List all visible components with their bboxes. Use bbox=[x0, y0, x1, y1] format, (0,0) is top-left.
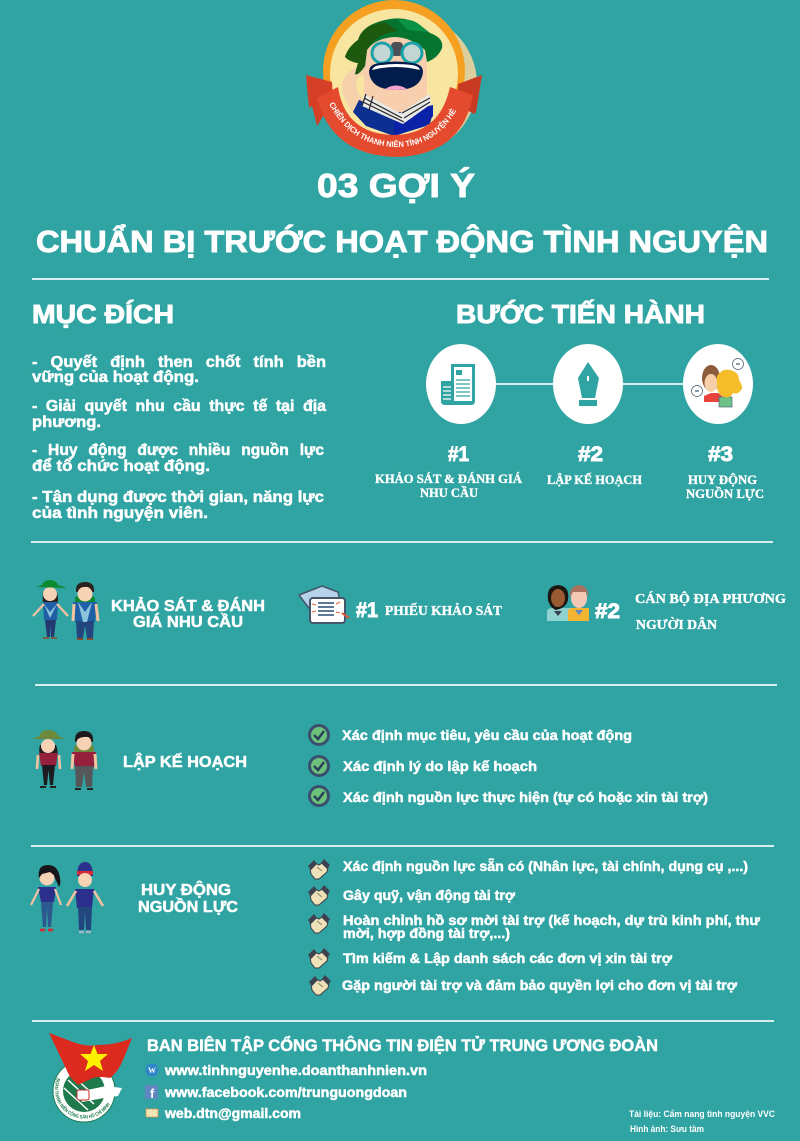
list item 1 bbox=[308, 857, 748, 879]
panel: planning section bbox=[32, 726, 708, 806]
step 3 label: #3 bbox=[708, 443, 733, 466]
facebook row: www.facebook.com/trunguongdoan bbox=[164, 1084, 407, 1100]
step 3 label: HUY ĐỘNG bbox=[688, 473, 757, 487]
purpose text block bbox=[32, 354, 326, 522]
website row: www.tinhnguyenhe.doanthanhnien.vn bbox=[164, 1062, 427, 1078]
panel: fundraising section bbox=[31, 857, 761, 995]
purpose text block: của tình nguyện viên. bbox=[32, 505, 208, 522]
fundraising list bbox=[308, 857, 761, 995]
website row: W bbox=[148, 1066, 156, 1075]
check item 1: Xác định mục tiêu, yêu cầu của hoạt động bbox=[342, 727, 632, 743]
icon: step 3 two people talking bbox=[683, 344, 753, 424]
purpose text block: - Quyết định then chốt tính bền bbox=[32, 354, 326, 371]
source credits bbox=[629, 1109, 775, 1134]
icon: campaign mascot badge bbox=[306, 0, 482, 157]
heading: steps: BƯỚC TIẾN HÀNH bbox=[456, 299, 705, 329]
step 1 label: NHU CẦU bbox=[420, 485, 478, 500]
list item 1: Xác định nguồn lực sẵn có (Nhân lực, tài chính, dụng cụ ,...) bbox=[343, 857, 748, 874]
survey section heading: GIÁ NHU CẦU bbox=[133, 612, 243, 631]
source credits: Tài liệu: Cẩm nang tình nguyện VVC bbox=[629, 1109, 775, 1119]
list item 5: Gặp người tài trợ và đảm bảo quyền lợi cho đơn vị tài trợ bbox=[342, 977, 737, 993]
item 1 label: #1 bbox=[356, 599, 378, 622]
purpose text block: vững của hoạt động. bbox=[32, 369, 199, 386]
list item 2 bbox=[308, 885, 515, 905]
list item 3: mời, hợp đồng tài trợ,...) bbox=[343, 925, 510, 941]
title line 1: 03 GỢI Ý bbox=[317, 167, 475, 204]
panel: steps bbox=[375, 299, 764, 501]
checklist bbox=[310, 726, 708, 806]
survey section heading bbox=[111, 596, 265, 631]
item 2 label bbox=[595, 590, 786, 633]
step 1 label bbox=[375, 443, 522, 500]
step 3 label bbox=[686, 443, 764, 501]
icon: youth union emblem bbox=[49, 1033, 132, 1122]
list item 4: Tìm kiếm & Lập danh sách các đơn vị xin tài trợ bbox=[343, 950, 672, 966]
email row: web.dtn@gmail.com bbox=[164, 1105, 301, 1121]
purpose text block: phương. bbox=[32, 414, 101, 431]
item 2 label: NGƯỜI DÂN bbox=[636, 616, 717, 633]
fundraising section heading: HUY ĐỘNG bbox=[141, 880, 231, 899]
fundraising section heading bbox=[138, 880, 238, 916]
icon: volunteers in navy polo bbox=[31, 862, 103, 932]
heading: purpose: MỤC ĐÍCH bbox=[32, 299, 174, 329]
step 1 label: #1 bbox=[448, 443, 469, 466]
step 2 label: #2 bbox=[578, 443, 603, 466]
step 1 label: KHẢO SÁT & ĐÁNH GIÁ bbox=[375, 472, 522, 486]
icon: step 1 newspaper bbox=[426, 344, 496, 424]
facebook row: f bbox=[150, 1086, 155, 1101]
icon: volunteers in red polo bbox=[32, 730, 96, 789]
step 2 label: LẬP KẾ HOẠCH bbox=[547, 472, 642, 487]
item 2 label: CÁN BỘ ĐỊA PHƯƠNG bbox=[635, 590, 786, 607]
list item 2: Gây quỹ, vận động tài trợ bbox=[343, 887, 515, 903]
purpose text block: - Giải quyết nhu cầu thực tế tại địa bbox=[32, 398, 326, 415]
step 3 label: NGUỒN LỰC bbox=[686, 486, 764, 501]
icon: survey form bbox=[299, 586, 349, 623]
survey section heading: KHẢO SÁT & ĐÁNH bbox=[111, 596, 265, 615]
list item 3: Hoàn chỉnh hồ sơ mời tài trợ (kế hoạch, dự trù kinh phí, thư bbox=[343, 912, 761, 928]
list item 3 bbox=[308, 912, 761, 941]
item 1 label bbox=[356, 599, 502, 622]
fundraising section heading: NGUỒN LỰC bbox=[138, 897, 238, 916]
step 2 label bbox=[547, 443, 642, 487]
item 1 label: PHIẾU KHẢO SÁT bbox=[385, 603, 502, 618]
purpose text block: - Tận dụng được thời gian, năng lực bbox=[32, 489, 324, 506]
item 2 label: #2 bbox=[595, 600, 620, 623]
footer heading: BAN BIÊN TẬP CỔNG THÔNG TIN ĐIỆN TỬ TRUNG ƯƠNG ĐOÀN bbox=[147, 1036, 658, 1055]
icon: youth union emblem: ĐOÀN THANH NIÊN CỘNG SẢN HỒ CHÍ MINH bbox=[54, 1078, 110, 1119]
planning section heading: LẬP KẾ HOẠCH bbox=[123, 752, 247, 771]
title line 2: CHUẨN BỊ TRƯỚC HOẠT ĐỘNG TÌNH NGUYỆN bbox=[36, 223, 768, 259]
panel: survey section bbox=[33, 580, 786, 639]
icon: campaign mascot badge: CHIẾN DỊCH THANH NIÊN TÌNH NGUYỆN HÈ bbox=[330, 102, 456, 147]
panel: footer bbox=[49, 1033, 775, 1134]
icon: local officials and residents bbox=[547, 585, 589, 621]
icon: volunteers in blue uniform bbox=[33, 580, 98, 639]
panel: purpose bbox=[32, 299, 326, 522]
icon: step 2 pen nib bbox=[553, 344, 623, 424]
check item 2: Xác định lý do lập kế hoạch bbox=[343, 758, 537, 774]
purpose text block: để tổ chức hoạt động. bbox=[32, 458, 210, 475]
purpose text block: - Huy động được nhiều nguồn lực bbox=[32, 442, 324, 459]
check item 2 bbox=[310, 756, 537, 776]
check item 3: Xác định nguồn lực thực hiện (tự có hoặc xin tài trợ) bbox=[343, 789, 708, 805]
source credits: Hình ảnh: Sưu tầm bbox=[630, 1124, 704, 1134]
